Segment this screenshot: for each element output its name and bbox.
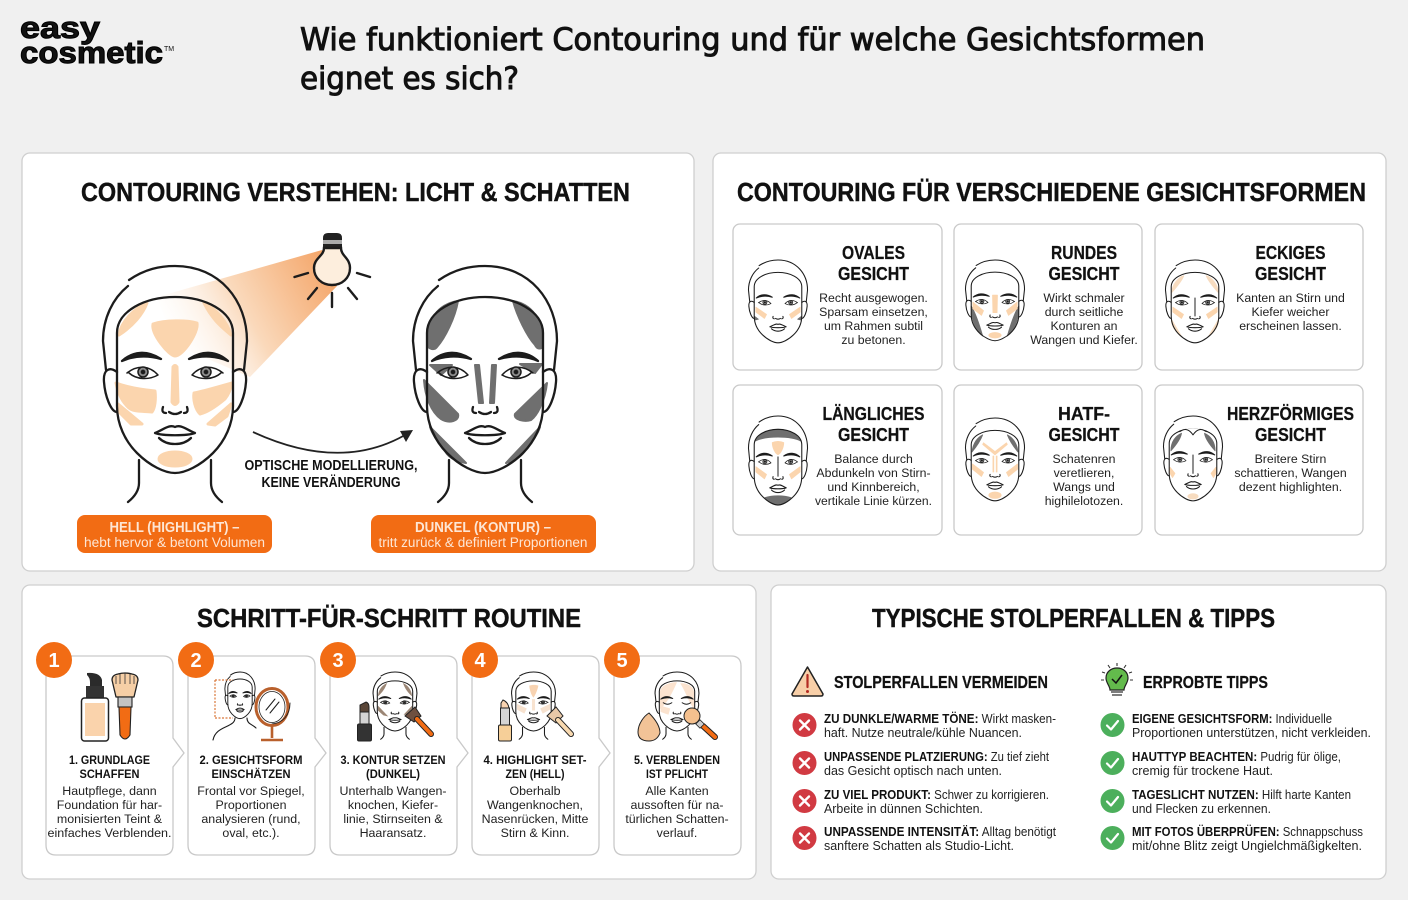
step 5: verblenden: aussoften für na- [631,798,723,812]
tip 4 [1100,824,1363,853]
caption: optische modellierung: OPTISCHE MODELLIERUNG, [244,458,418,474]
title: Wie funktioniert Contouring und für welche Gesichtsformen [300,22,1205,58]
panel: Schritt-fuer-Schritt Routine [22,585,756,879]
card: hatf gesicht: HATF- [1058,404,1110,424]
step 2: gesichtsform: 2 [190,650,202,672]
card: rundes gesicht [954,224,1142,370]
panel: Stolperfallen und Tipps [771,585,1386,879]
subheading: erprobte tipps: ERPROBTE TIPPS [1143,672,1268,692]
step 5: verblenden: 5 [616,650,628,672]
badge: dunkel kontur: tritt zurück & definiert Proportionen [378,535,588,550]
icon: green bulb [1101,663,1133,695]
card: hatf gesicht [954,385,1142,535]
badge: hell highlight [77,515,272,553]
pitfall 1: ZU DUNKLE/WARME TÖNE: Wirkt masken- [824,711,1056,726]
heading: routine: SCHRITT-FÜR-SCHRITT ROUTINE [197,603,581,633]
icon: schwamm, gesicht, pinsel [638,672,715,741]
step 1: grundlage: SCHAFFEN [80,767,140,781]
tip 2: cremig für trockene Haut. [1132,764,1273,778]
card: laengliches gesicht: LÄNGLICHES [822,404,924,424]
step 3: kontur: (DUNKEL) [366,767,420,781]
panel: Gesichtsformen [713,153,1386,571]
step 1: grundlage: 1 [48,650,60,672]
title [300,22,1205,97]
pitfall 1: haft. Nutze neutrale/kühle Nuancen. [824,726,1022,740]
logo: easy cosmetic: cosmetic [20,35,163,70]
pitfall 4 [792,824,1056,853]
tip 3: TAGESLICHT NUTZEN: Hilft harte Kanten [1132,788,1351,802]
step 1: grundlage: monisierten Teint & [57,812,163,826]
logo: easy cosmetic: TM [164,46,174,53]
tip 2 [1100,750,1341,778]
step 3: kontur: knochen, Kiefer- [348,798,438,812]
card: rundes gesicht: durch seitliche [1045,305,1123,319]
card: eckiges gesicht: Kiefer weicher [1252,305,1329,319]
card: eckiges gesicht: GESICHT [1255,264,1326,284]
step 1: grundlage: einfaches Verblenden. [48,826,172,840]
step 3: kontur: linie, Stirnseiten & [343,812,443,826]
face with contour zones [413,266,557,502]
badge: dunkel kontur: DUNKEL (KONTUR) – [415,520,551,536]
heading: stolperfallen: TYPISCHE STOLPERFALLEN & TIPPS [872,603,1275,633]
card: ovales gesicht: Recht ausgewogen. [819,291,928,305]
step 4: highlight: Stirn & Kinn. [501,826,569,840]
card: herzfoermiges gesicht [1155,385,1363,535]
tip 1: EIGENE GESICHTSFORM: Individuelle [1132,712,1332,726]
card: eckiges gesicht: erscheinen lassen. [1239,319,1342,333]
card: laengliches gesicht: Abdunkeln von Stirn- [816,466,931,480]
card: hatf gesicht: highilelotozen. [1045,494,1123,508]
card: laengliches gesicht: und Kinnbereich, [827,480,920,494]
step 2: gesichtsform [178,642,326,855]
panel: Contouring verstehen [22,153,694,571]
pitfall 2: das Gesicht optisch nach unten. [824,764,1002,778]
icon: heller stift, gesicht, pinsel [498,672,571,741]
step 5: verblenden: verlauf. [657,826,697,840]
step 2: gesichtsform: EINSCHÄTZEN [212,766,291,781]
step 2: gesichtsform: 2. GESICHTSFORM [200,753,302,767]
subheading: stolperfallen vermeiden: STOLPERFALLEN VERMEIDEN [834,672,1048,692]
arrow: modellierung [253,430,413,453]
step 3: kontur: Unterhalb Wangen- [340,784,446,798]
card: rundes gesicht: Wirkt schmaler [1043,291,1125,305]
light beam [157,250,337,377]
step 3: kontur: 3. KONTUR SETZEN [340,753,446,767]
icon: warning triangle [792,667,823,696]
card: herzfoermiges gesicht: dezent highlighten. [1239,480,1342,494]
step 2: gesichtsform: Proportionen [216,798,287,812]
card: rundes gesicht: Wangen und Kiefer. [1030,333,1138,347]
badge: hell highlight: HELL (HIGHLIGHT) – [110,520,240,536]
badge: hell highlight: hebt hervor & betont Volumen [84,535,265,550]
step 2: gesichtsform: analysieren (rund, [201,812,301,826]
card: laengliches gesicht: vertikale Linie kürzen. [815,494,932,508]
card: rundes gesicht: GESICHT [1048,264,1120,284]
logo: easy cosmetic [20,10,174,70]
card: rundes gesicht: Konturen an [1050,319,1118,333]
card: herzfoermiges gesicht: GESICHT [1255,425,1326,445]
step 3: kontur [320,642,468,855]
title: eignet es sich? [300,61,519,97]
step 4: highlight: 4. HIGHLIGHT SET- [484,753,586,767]
icon: foundation und pinsel [82,673,138,741]
tip 4: MIT FOTOS ÜBERPRÜFEN: Schnappschuss [1132,824,1363,839]
tip 2: HAUTTYP BEACHTEN: Pudrig für ölige, [1132,750,1341,764]
card: herzfoermiges gesicht: HERZFÖRMIGES [1227,404,1354,424]
step 2: gesichtsform: Frontal vor Spiegel, [197,784,305,798]
step 4: highlight: ZEN (HELL) [506,767,564,781]
step 1: grundlage: 1. GRUNDLAGE [69,753,150,767]
tip 3 [1100,788,1351,816]
step 5: verblenden [604,642,741,855]
pitfall 4: sanftere Schatten als Studio-Licht. [824,839,1014,853]
step 1: grundlage [36,642,184,855]
step 4: highlight: Oberhalb [510,784,561,798]
card: hatf gesicht: Schatenren [1053,452,1116,466]
card: hatf gesicht: GESICHT [1048,425,1120,445]
step 4: highlight: Wangenknochen, [487,798,583,812]
card: rundes gesicht: RUNDES [1051,243,1117,263]
step 4: highlight: 4 [474,650,486,672]
caption: optische modellierung: KEINE VERÄNDERUNG [262,474,400,491]
card: herzfoermiges gesicht: schattieren, Wangen [1234,466,1347,480]
step 2: gesichtsform: oval, etc.). [222,826,280,840]
card: herzfoermiges gesicht: Breitere Stirn [1255,452,1327,466]
logo: easy cosmetic: easy [20,10,101,45]
card: eckiges gesicht: ECKIGES [1256,243,1326,263]
card: laengliches gesicht [733,385,942,535]
step 4: highlight: Nasenrücken, Mitte [482,812,588,826]
step 4: highlight [462,642,610,855]
pitfall 3: Arbeite in dünnen Schichten. [824,802,983,816]
card: laengliches gesicht: Balance durch [834,452,913,466]
step 5: verblenden: Alle Kanten [645,784,709,798]
tip 4: mit/ohne Blitz zeigt Ungielchmäßigkelten. [1132,839,1362,853]
step 1: grundlage: Hautpflege, dann [62,784,157,798]
pitfall 3: ZU VIEL PRODUKT: Schwer zu korrigieren. [824,788,1049,802]
step 3: kontur: 3 [332,650,344,672]
card: ovales gesicht [733,224,942,370]
card: hatf gesicht: Wangs und [1053,480,1115,494]
step 5: verblenden: 5. VERBLENDEN [634,753,720,767]
step 3: kontur: Haaransatz. [360,826,426,840]
card: ovales gesicht: GESICHT [838,264,909,284]
card: ovales gesicht: um Rahmen subtil [824,319,923,333]
icon: light bulb [294,233,370,307]
tip 1: Proportionen unterstützen, nicht verkleiden. [1132,726,1371,740]
pitfall 3 [792,788,1049,816]
step 1: grundlage: Foundation für har- [57,798,162,812]
card: laengliches gesicht: GESICHT [838,425,909,445]
card: ovales gesicht: zu betonen. [841,333,906,347]
tip 3: und Flecken zu erkennen. [1132,802,1271,816]
card: eckiges gesicht [1155,224,1363,370]
face with highlight zones [103,266,247,502]
caption: optische modellierung [244,458,418,491]
pitfall 1 [792,711,1056,740]
card: hatf gesicht: veretlieren, [1054,466,1114,480]
badge: dunkel kontur [371,515,596,553]
card: ovales gesicht: Sparsam einsetzen, [819,305,928,319]
pitfall 4: UNPASSENDE INTENSITÄT: Alltag benötigt [824,824,1056,839]
pitfall 2: UNPASSENDE PLATZIERUNG: Zu tief zieht [824,750,1049,764]
card: ovales gesicht: OVALES [842,243,905,263]
icon: dunkler stift, gesicht, pinsel [358,672,431,741]
step 5: verblenden: IST PFLICHT [646,767,708,781]
step 5: verblenden: türlichen Schatten- [625,812,729,826]
tip 1 [1100,712,1371,740]
heading: licht und schatten: CONTOURING VERSTEHEN: LICHT & SCHATTEN [81,177,630,207]
pitfall 2 [792,750,1049,778]
card: eckiges gesicht: Kanten an Stirn und [1236,291,1345,305]
icon: gesicht mit spiegel [213,672,290,740]
